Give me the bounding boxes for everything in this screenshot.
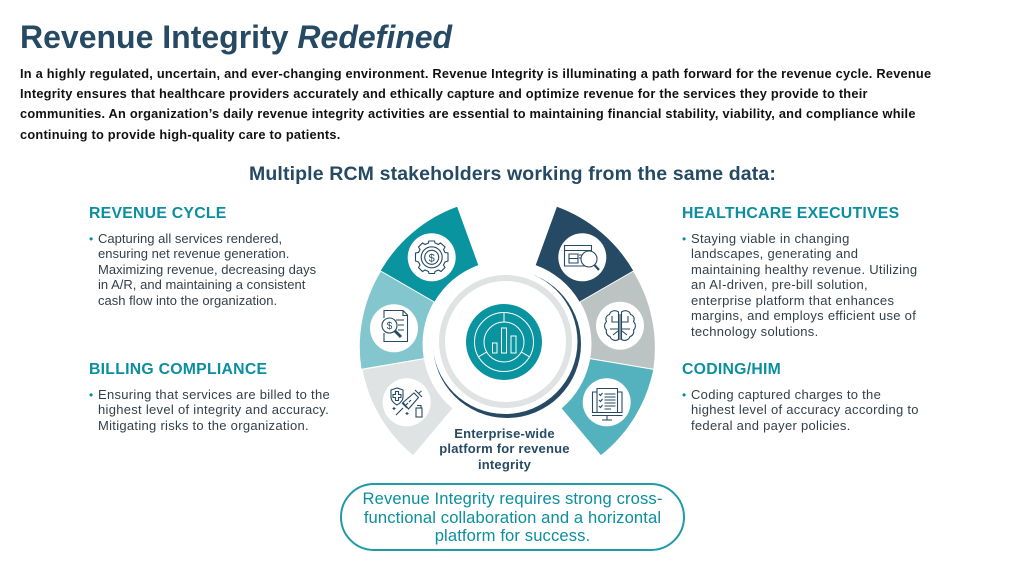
icon: brain circuit bbox=[596, 302, 644, 350]
callout: collaboration: platform for success. bbox=[435, 526, 590, 545]
icon: shield, syringe and vial bbox=[383, 378, 431, 426]
intro paragraph: continuing to provide high-quality care to patients. bbox=[20, 127, 341, 142]
intro paragraph bbox=[20, 66, 931, 142]
text: healthcare executives bullet bbox=[682, 231, 917, 339]
segment: billing compliance bbox=[362, 359, 453, 456]
panel: revenue cycle bbox=[89, 205, 316, 308]
icon: gear with dollar sign bbox=[408, 233, 456, 281]
callout: collaboration bbox=[340, 483, 685, 551]
panel: healthcare executives bbox=[682, 205, 917, 339]
panel: revenue cycle: ensuring net revenue generation. bbox=[98, 246, 289, 261]
panel: coding/him: federal and payer policies. bbox=[691, 418, 851, 433]
panel: coding/him: highest level of accuracy according to bbox=[691, 402, 919, 417]
panel: revenue cycle: Maximizing revenue, decreasing days bbox=[98, 262, 316, 277]
icon: monitor with checklist bbox=[583, 378, 631, 426]
callout: collaboration: functional collaboration and a horizontal bbox=[364, 508, 661, 527]
heading: revenue cycle: REVENUE CYCLE bbox=[89, 205, 227, 222]
center ring bbox=[432, 269, 581, 418]
panel: coding/him: Coding captured charges to the bbox=[691, 387, 881, 402]
panel: healthcare executives: maintaining healthy revenue. Utilizing bbox=[691, 262, 917, 277]
segment: revenue cycle bbox=[381, 207, 478, 302]
intro paragraph: communities. An organization’s daily revenue integrity activities are essential to maintaining financial stability, viability, and compliance while bbox=[20, 106, 916, 121]
label: enterprise-wide platform bbox=[439, 426, 570, 472]
panel: coding/him bbox=[682, 361, 919, 433]
heading: healthcare executives: HEALTHCARE EXECUTIVES bbox=[682, 205, 899, 222]
text: healthcare executives bullet: • bbox=[682, 232, 686, 246]
label: enterprise-wide platform: integrity bbox=[478, 457, 531, 472]
panel: billing compliance: Ensuring that services are billed to the bbox=[98, 387, 330, 402]
text: billing compliance bullet bbox=[89, 387, 330, 433]
heading: coding/him: CODING/HIM bbox=[682, 361, 781, 378]
panel: billing compliance: highest level of integrity and accuracy. bbox=[98, 402, 329, 417]
panel: healthcare executives: margins, and employs efficient use of bbox=[691, 308, 916, 323]
icon: document with magnifier and dollar: $ bbox=[387, 321, 393, 332]
panel: healthcare executives: enterprise platform that enhances bbox=[691, 293, 894, 308]
panel: revenue cycle: cash flow into the organization. bbox=[98, 293, 277, 308]
panel: healthcare executives: technology solutions. bbox=[691, 324, 819, 339]
segment: analytics bbox=[580, 271, 655, 369]
icon: dashboard with magnifier bbox=[558, 233, 606, 281]
panel: healthcare executives: Staying viable in changing bbox=[691, 231, 850, 246]
segment: healthcare executives bbox=[536, 207, 633, 302]
text: coding/him bullet: • bbox=[682, 388, 686, 402]
subheading: Multiple RCM stakeholders working from the same data: bbox=[249, 163, 776, 185]
heading: billing compliance: BILLING COMPLIANCE bbox=[89, 361, 267, 378]
icon: document with magnifier and dollar bbox=[370, 304, 418, 352]
panel: revenue cycle: in A/R, and maintaining a consistent bbox=[98, 277, 305, 292]
text: revenue cycle bullet: • bbox=[89, 232, 93, 246]
text: coding/him bullet bbox=[682, 387, 919, 433]
text: billing compliance bullet: • bbox=[89, 388, 94, 402]
panel: billing compliance: Mitigating risks to the organization. bbox=[98, 418, 309, 433]
intro paragraph: In a highly regulated, uncertain, and ever-changing environment. Revenue Integrity is illuminating a path forward for the revenue cycle. Revenue bbox=[20, 66, 931, 81]
text: revenue cycle bullet bbox=[89, 231, 316, 308]
segment: billing support bbox=[359, 271, 434, 369]
label: enterprise-wide platform: Enterprise-wide bbox=[454, 426, 555, 441]
panel: billing compliance bbox=[89, 361, 330, 433]
intro paragraph: Integrity ensures that healthcare providers accurately and ethically capture and optimize revenue for the services they provide to their bbox=[20, 86, 868, 101]
center icon: donut chart with bars bbox=[466, 304, 542, 380]
segment: coding/him bbox=[561, 359, 654, 456]
panel: revenue cycle: Capturing all services rendered, bbox=[98, 231, 282, 246]
title: Revenue Integrity Redefined bbox=[20, 19, 452, 55]
panel: healthcare executives: an AI-driven, pre-bill solution, bbox=[691, 277, 868, 292]
callout: collaboration: Revenue Integrity requires strong cross- bbox=[363, 489, 662, 508]
icon: gear with dollar sign: $ bbox=[429, 252, 435, 264]
panel: healthcare executives: landscapes, generating and bbox=[691, 246, 858, 261]
label: enterprise-wide platform: platform for revenue bbox=[439, 441, 570, 456]
